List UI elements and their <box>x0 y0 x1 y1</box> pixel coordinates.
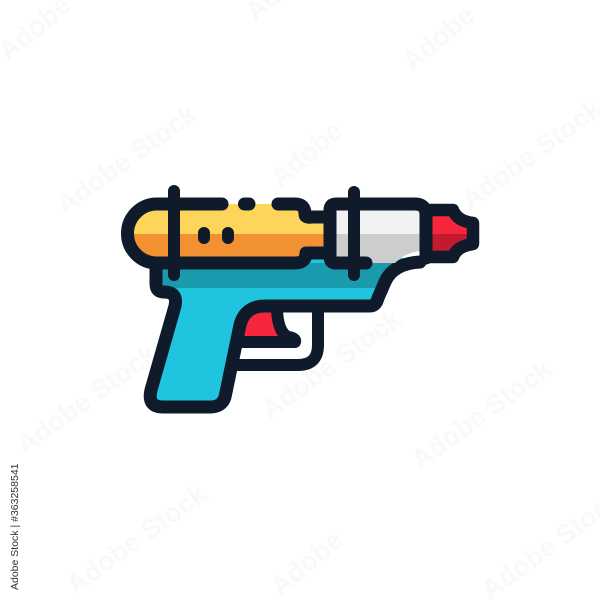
water tank <box>128 204 330 263</box>
trigger fill <box>243 304 280 340</box>
stock watermarks: Adobe Stock <box>11 338 163 460</box>
stock id label: Adobe Stock | #363258541 <box>9 463 21 590</box>
water gun <box>128 191 473 407</box>
water level marks <box>204 233 228 238</box>
gun body and grip <box>150 258 420 407</box>
stock watermarks: Adobe <box>397 0 480 77</box>
nozzle tip <box>427 210 473 257</box>
stock watermarks: Adobe Stock <box>256 303 408 425</box>
stock watermarks: Adobe Stock <box>51 98 203 220</box>
stock watermarks: Adobe Stock <box>406 353 558 475</box>
stock watermarks: Adobe <box>265 116 348 193</box>
straps <box>174 191 354 275</box>
trigger <box>242 310 295 342</box>
stock watermarks: Adobe Stock <box>61 478 213 600</box>
stock watermarks: Adobe <box>265 525 348 600</box>
white barrel <box>330 204 426 263</box>
trigger guard <box>237 306 318 365</box>
